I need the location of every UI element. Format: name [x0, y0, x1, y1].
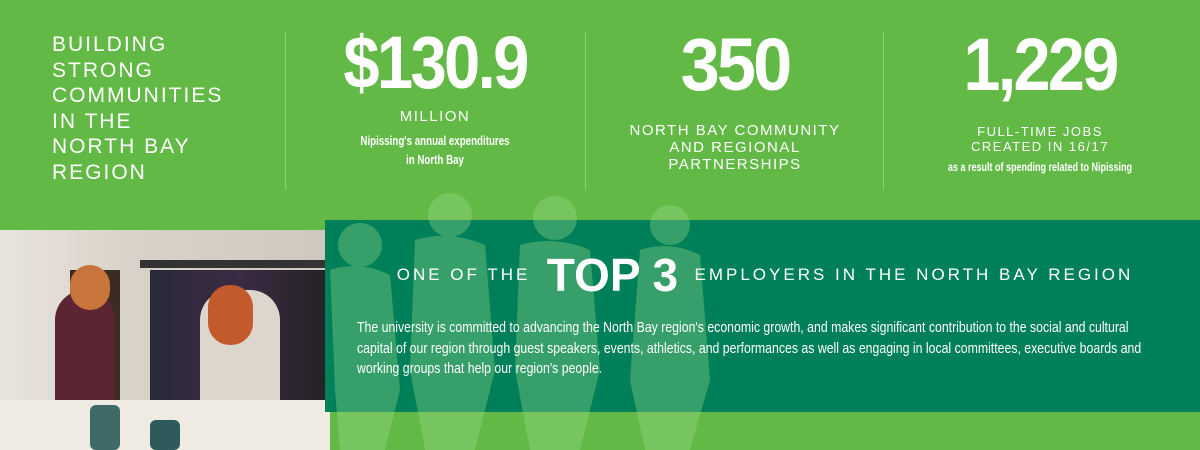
stat: partnerships: PARTNERSHIPS — [668, 156, 802, 173]
stat: jobs: CREATED IN 16/17 — [971, 139, 1109, 154]
stat: jobs — [948, 23, 1132, 174]
stat: jobs: as a result of spending related to Nipissing — [948, 160, 1132, 174]
stat: expenditures: in North Bay — [406, 152, 464, 167]
heading: top 3: ONE OF THE TOP 3 EMPLOYERS IN THE NORTH BAY REGION — [397, 249, 1133, 301]
stat: partnerships: AND REGIONAL — [669, 139, 801, 156]
stat: partnerships — [629, 23, 840, 173]
title: STRONG — [52, 58, 154, 82]
panel: top 3 employers — [325, 220, 1200, 412]
stat: expenditures: MILLION — [400, 108, 470, 125]
stat: jobs: 1,229 — [963, 23, 1117, 106]
stat: jobs: FULL-TIME JOBS — [977, 124, 1103, 139]
title — [52, 33, 223, 184]
stat: partnerships: 350 — [681, 23, 789, 106]
photo: shop — [0, 230, 330, 450]
title: COMMUNITIES — [52, 84, 223, 107]
stat: expenditures — [343, 21, 527, 167]
stat: expenditures: Nipissing's annual expenditures — [360, 133, 510, 148]
stat: expenditures: $130.9 — [343, 21, 527, 104]
title: BUILDING — [52, 33, 167, 56]
silhouettes: people — [330, 193, 710, 450]
title: IN THE — [52, 110, 132, 132]
text block: description: The university is committed to advancing the North Bay region's economic growth, and makes significant contribution to the social and cultural capital of our region through guest speakers, events, athletics, and performances as well as engaging in local committees, executive boards and working groups that help our region's people. — [357, 319, 1141, 377]
title: REGION — [52, 160, 147, 184]
stat: partnerships: NORTH BAY COMMUNITY — [629, 122, 840, 139]
title: NORTH BAY — [52, 135, 191, 158]
